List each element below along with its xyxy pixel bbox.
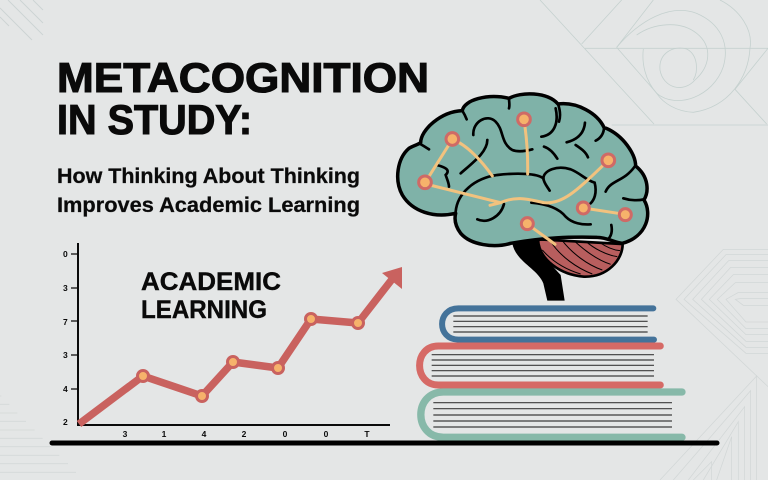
green book xyxy=(421,392,682,437)
y axis ticks and labels: 4 xyxy=(63,384,68,394)
neural nodes xyxy=(419,113,631,230)
ground line xyxy=(52,440,717,446)
chart axes xyxy=(78,243,390,425)
red book xyxy=(420,346,660,385)
line chart xyxy=(63,243,402,439)
subtitle: Improves Academic Learning xyxy=(57,194,360,217)
y axis ticks and labels xyxy=(63,249,78,427)
cerebrum xyxy=(398,94,648,246)
subtitle: How Thinking About Thinking xyxy=(57,165,360,188)
cerebellum xyxy=(538,239,623,277)
y axis ticks and labels: 0 xyxy=(63,249,68,259)
x axis labels: 2 xyxy=(242,429,247,439)
x axis labels xyxy=(123,429,370,439)
data points xyxy=(138,314,364,402)
chart label: ACADEMIC xyxy=(141,268,281,296)
y axis ticks and labels: 3 xyxy=(63,283,68,293)
chart label xyxy=(141,268,281,324)
x axis labels: 4 xyxy=(202,429,207,439)
chart label: LEARNING xyxy=(141,296,267,324)
blue book xyxy=(442,308,654,340)
x axis labels: 1 xyxy=(162,429,167,439)
title: METACOGNITION xyxy=(57,54,429,101)
x axis labels: 0 xyxy=(283,429,288,439)
brain stem xyxy=(512,239,565,301)
subtitle xyxy=(57,165,360,217)
stack of books xyxy=(420,308,682,437)
x axis labels: T xyxy=(364,429,370,439)
y axis ticks and labels: 2 xyxy=(63,417,68,427)
rising trend line with arrow xyxy=(79,267,402,424)
brain illustration xyxy=(398,94,648,301)
brain folds xyxy=(419,98,644,239)
x axis labels: 0 xyxy=(324,429,329,439)
y axis ticks and labels: 7 xyxy=(63,317,68,327)
y axis ticks and labels: 3 xyxy=(63,350,68,360)
title xyxy=(57,54,429,143)
x axis labels: 3 xyxy=(123,429,128,439)
neural pathways xyxy=(426,120,625,244)
title: IN STUDY: xyxy=(57,96,252,143)
